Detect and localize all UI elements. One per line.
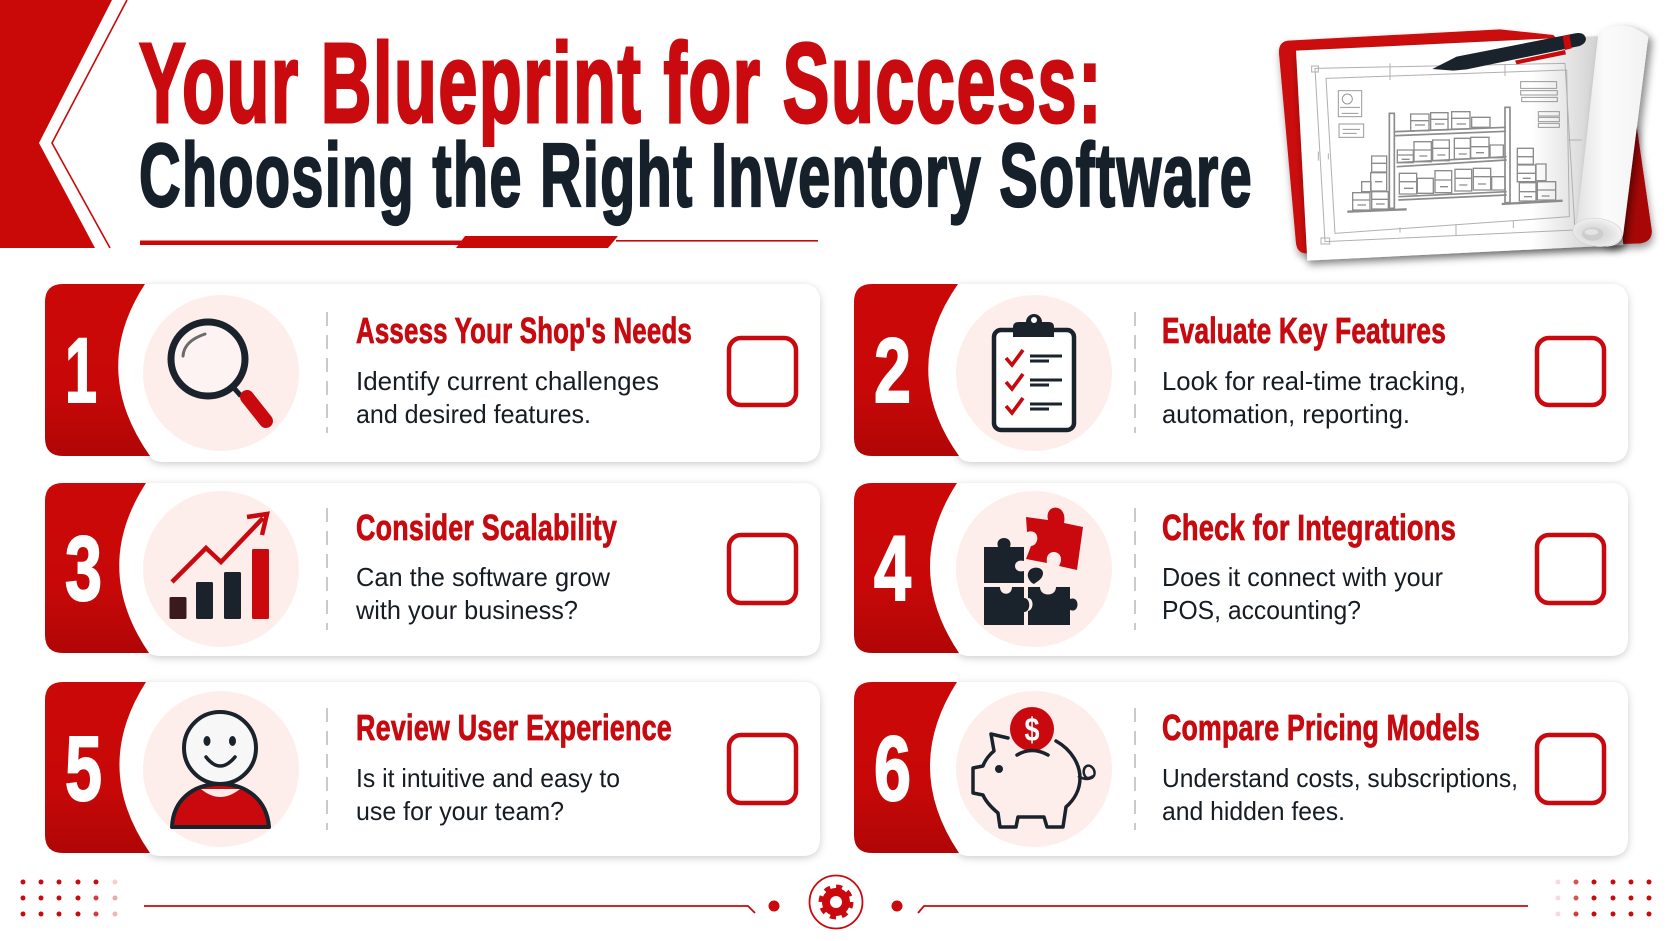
title line 1: Your Blueprint for Success: [139,20,1103,146]
heading: Consider Scalability [356,507,617,548]
paper roll [1577,26,1648,247]
divider [1134,312,1136,433]
card 5: user experience [45,682,820,856]
icon: magnifying glass [171,322,266,421]
card background [119,483,820,656]
number tab [854,682,959,853]
number: 1 [65,320,97,422]
card background [119,682,820,856]
divider [1134,508,1136,630]
description [1162,562,1443,625]
icon: clipboard checklist [994,314,1074,430]
divider [1134,708,1136,830]
number: 4 [874,518,911,620]
description: use for your team? [356,796,564,826]
footer line right [918,906,1528,913]
description [356,366,659,429]
icon circle [956,691,1112,847]
icon circle [143,691,299,847]
number: 6 [874,718,911,820]
icon: growth chart [170,514,269,619]
card 1: assess needs [45,284,820,462]
corner chevron banner [0,0,127,248]
dot grid left [20,880,118,916]
description: Identify current challenges [356,366,659,396]
description: Does it connect with your [1162,562,1443,592]
divider [326,508,328,630]
icon circle [143,491,299,647]
checkbox [729,735,796,803]
card 2: key features [854,284,1628,462]
heading: Compare Pricing Models [1162,707,1480,748]
pen [1432,33,1586,71]
card background [930,682,1628,856]
checkbox [1537,735,1604,803]
description: and desired features. [356,399,591,429]
number: 5 [65,718,102,820]
card background [118,284,820,462]
icon: piggy bank with coin [973,707,1095,827]
icon circle [956,491,1112,647]
card 4: integrations [854,483,1628,656]
description: with your business? [355,595,578,625]
number tab [45,483,149,653]
number tab [854,483,959,653]
number: 3 [65,518,102,620]
heading: Evaluate Key Features [1162,310,1446,351]
footer dot right [892,900,902,912]
description: POS, accounting? [1162,595,1361,625]
icon: smiling user [172,712,269,827]
red clipboard board [1279,29,1652,253]
dot grid right [1556,880,1652,916]
checkbox [729,338,796,405]
divider [326,312,328,433]
description: Can the software grow [356,562,610,592]
description [1162,763,1518,826]
title underline [140,236,818,248]
number tab [45,284,150,456]
icon: gear badge [810,876,862,928]
description: Look for real-time tracking, [1162,366,1466,396]
footer line left [144,906,755,913]
description: and hidden fees. [1162,796,1345,826]
icon: piggy bank with coin: $ [1024,711,1040,748]
number: 2 [874,320,911,422]
card background [930,483,1628,656]
checkbox [1537,535,1604,603]
description [355,562,610,625]
icon circle [956,295,1112,451]
description: automation, reporting. [1162,399,1410,429]
checkbox [1537,338,1604,405]
checkbox [729,535,796,603]
blueprint drawing [1312,63,1582,244]
card background [928,284,1628,462]
icon circle [143,295,299,451]
card 3: scalability [45,483,820,656]
description: Understand costs, subscriptions, [1162,763,1518,793]
description [356,763,620,826]
illustration: blueprint with pen [1279,26,1652,261]
number tab [45,682,150,853]
heading: Check for Integrations [1162,507,1456,548]
icon: puzzle pieces [984,508,1083,625]
heading: Assess Your Shop's Needs [356,310,692,351]
description [1162,366,1466,429]
number tab [854,284,959,456]
title [139,20,1253,226]
footer dot left [768,900,780,912]
description: Is it intuitive and easy to [356,763,620,793]
heading: Review User Experience [356,707,672,748]
blueprint paper [1296,36,1623,261]
card 6: pricing [854,682,1628,856]
divider [326,708,328,830]
roll end [1571,216,1623,249]
footer [20,876,1652,928]
